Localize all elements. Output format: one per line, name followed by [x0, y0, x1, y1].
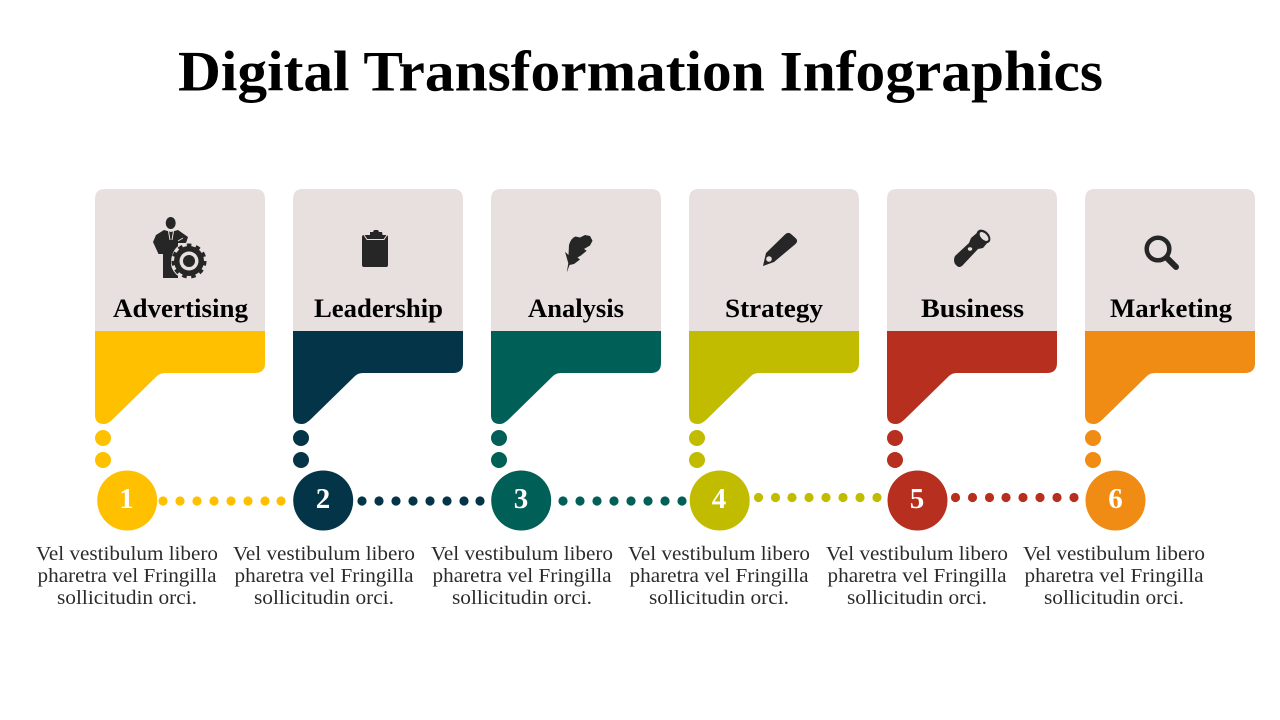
text block: step 2: Vel vestibulum libero	[233, 543, 415, 565]
callout tab	[491, 331, 661, 424]
callout tab	[293, 331, 463, 424]
panel: analysis card	[491, 189, 661, 424]
step 2 marker: 2	[316, 483, 330, 515]
text block: step 3	[431, 543, 613, 609]
step 4 marker: 4	[712, 483, 726, 515]
panel: leadership card	[293, 189, 463, 424]
text block: step 6: pharetra vel Fringilla	[1024, 565, 1204, 587]
step 1 marker	[95, 430, 286, 530]
text block: step 1: pharetra vel Fringilla	[38, 565, 217, 587]
icon: pencil	[763, 233, 797, 266]
panel: advertising card	[95, 189, 265, 424]
icon: clipboard	[362, 230, 388, 267]
icon: businessman with gear	[153, 217, 208, 280]
callout tab	[1085, 331, 1255, 424]
text block: step 5: sollicitudin orci.	[847, 587, 987, 609]
heading: Advertising	[113, 293, 248, 323]
text block: step 4: pharetra vel Fringilla	[630, 565, 809, 587]
step 6 marker: 6	[1108, 483, 1123, 515]
text block: step 3: sollicitudin orci.	[452, 587, 592, 609]
text block: step 1: sollicitudin orci.	[57, 587, 197, 609]
text block: step 2: sollicitudin orci.	[254, 587, 394, 609]
text block: step 1: Vel vestibulum libero	[36, 543, 218, 565]
step 6 marker	[1085, 430, 1146, 530]
callout tab	[95, 331, 265, 424]
icon: feather	[565, 235, 592, 273]
text block: step 2: pharetra vel Fringilla	[234, 565, 414, 587]
text block: step 6: sollicitudin orci.	[1044, 587, 1184, 609]
icon: magnifier	[1147, 238, 1176, 267]
text block: step 4: Vel vestibulum libero	[628, 543, 810, 565]
title: Digital Transformation Infographics	[178, 40, 1103, 104]
text block: step 4	[628, 543, 810, 609]
step 2 marker	[293, 430, 485, 530]
step 5 marker	[887, 430, 1079, 530]
heading: Strategy	[725, 293, 823, 323]
text block: step 5: pharetra vel Fringilla	[828, 565, 1007, 587]
text block: step 5: Vel vestibulum libero	[826, 543, 1008, 565]
text block: step 6: Vel vestibulum libero	[1023, 543, 1205, 565]
text block: step 2	[233, 543, 415, 609]
step 3 marker: 3	[514, 483, 528, 515]
text block: step 6	[1023, 543, 1205, 609]
callout tab	[689, 331, 859, 424]
panel: marketing card	[1085, 189, 1255, 424]
icon: flashlight	[954, 227, 993, 267]
text block: step 4: sollicitudin orci.	[649, 587, 789, 609]
panel: business card	[887, 189, 1057, 424]
heading: Marketing	[1110, 293, 1232, 323]
text block: step 3: Vel vestibulum libero	[431, 543, 613, 565]
step 5 marker: 5	[910, 483, 924, 515]
heading: Leadership	[314, 293, 443, 323]
text block: step 1	[36, 543, 218, 609]
heading: Business	[921, 293, 1024, 323]
callout tab	[887, 331, 1057, 424]
heading: Analysis	[528, 293, 624, 323]
panel: strategy card	[689, 189, 859, 424]
step 4 marker	[689, 430, 882, 530]
step 3 marker	[491, 430, 687, 530]
text block: step 5	[826, 543, 1008, 609]
text block: step 3: pharetra vel Fringilla	[432, 565, 612, 587]
step 1 marker: 1	[119, 483, 134, 515]
